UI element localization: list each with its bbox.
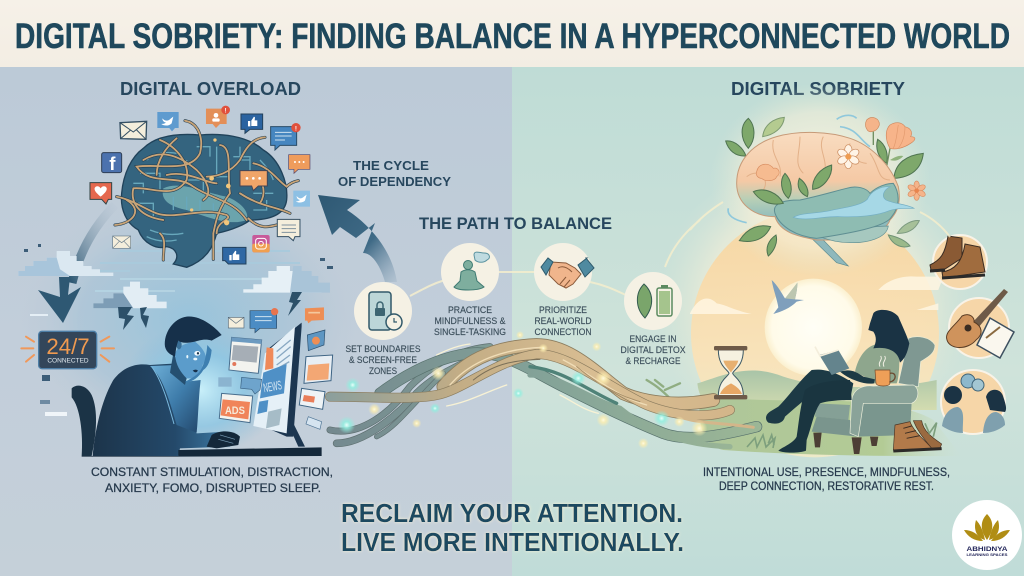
icon: 24/7 connected display: 24/7 bbox=[46, 334, 90, 359]
caption: sobriety benefits: INTENTIONAL USE, PRESENCE, MINDFULNESS, bbox=[703, 465, 950, 479]
icon: chat alert bbox=[271, 123, 301, 150]
monitor with news bbox=[253, 323, 305, 447]
label: step 3: REAL-WORLD bbox=[534, 315, 592, 326]
panel: right background, digital sobriety bbox=[512, 66, 1024, 576]
caption: overload symptoms bbox=[91, 465, 333, 495]
armchair bbox=[812, 337, 935, 454]
icon: guitar bbox=[946, 289, 1008, 348]
arrow: cycle of dependency, down arrow bbox=[38, 205, 115, 323]
twisted rope path bbox=[330, 331, 757, 449]
icon: chat alert: ! bbox=[295, 125, 297, 132]
label: the cycle of dependency bbox=[338, 158, 451, 189]
caption: sobriety benefits bbox=[703, 465, 950, 493]
clouds, left bbox=[18, 251, 330, 308]
icon: lightning bolts bbox=[118, 292, 302, 330]
icon: twitter square bbox=[293, 191, 310, 207]
icon: envelope bbox=[120, 121, 147, 139]
water wave bbox=[793, 187, 914, 219]
icon: phone with lock and clock bbox=[369, 292, 402, 330]
title band bbox=[0, 0, 1024, 67]
leaves and flowers behind brain bbox=[726, 117, 923, 256]
man torso bbox=[93, 363, 230, 456]
glow behind sun bbox=[657, 153, 970, 460]
icon: tangled circuit brain bbox=[115, 121, 298, 267]
logo: abhidnya learning spaces bbox=[952, 500, 1022, 570]
sleeve highlight bbox=[152, 367, 174, 424]
icon: thumbs up bbox=[241, 114, 263, 133]
popup: orange tag bbox=[305, 307, 324, 323]
icon: facebook: f bbox=[109, 153, 116, 174]
label: step 2: MINDFULNESS & bbox=[434, 315, 506, 326]
rope: front tan strands bbox=[330, 345, 753, 427]
man hand on head bbox=[185, 345, 212, 382]
icon: thumbs up lower bbox=[223, 247, 246, 264]
popup: small chats bbox=[218, 377, 262, 394]
caption: overload symptoms: CONSTANT STIMULATION, DISTRACTION, bbox=[91, 465, 333, 479]
label: step 1: ZONES bbox=[369, 365, 397, 376]
label: step 3: CONNECTION bbox=[534, 326, 592, 337]
heading: the path to balance: THE PATH TO BALANCE bbox=[419, 215, 612, 233]
icon: twitter bubble bbox=[157, 112, 179, 131]
icon: envelope lower bbox=[113, 236, 131, 248]
icon: handshake bbox=[541, 258, 594, 288]
brain glow bbox=[710, 83, 930, 277]
panel: left background, digital overload bbox=[0, 66, 512, 576]
man arm bbox=[150, 365, 201, 433]
sobriety sun scene bbox=[657, 153, 970, 460]
icon: large orange chat bbox=[240, 171, 267, 191]
label: step 3: PRIORITIZE bbox=[539, 304, 587, 315]
icon: facebook bbox=[102, 153, 122, 174]
glow behind man bbox=[120, 323, 280, 457]
icon: instagram bbox=[252, 235, 270, 252]
chair bbox=[72, 386, 96, 456]
label: step 2: PRACTICE bbox=[448, 304, 492, 315]
man at computer scene bbox=[21, 307, 333, 457]
icon: lotus bbox=[964, 514, 1010, 541]
circle: hiking boots bbox=[930, 235, 987, 289]
sun disc bbox=[691, 209, 939, 457]
cerebellum bbox=[820, 226, 888, 243]
label: step 1: & SCREEN-FREE bbox=[349, 354, 417, 365]
ground bbox=[699, 399, 962, 456]
icon: profile notification: ! bbox=[225, 108, 227, 114]
icon: hourglass bbox=[714, 346, 747, 399]
heading: digital overload: DIGITAL OVERLOAD bbox=[120, 79, 301, 99]
rope: twig leaves bbox=[647, 380, 680, 398]
icon: battery bbox=[657, 285, 672, 316]
hills bbox=[697, 371, 937, 410]
icon: meditating figure bbox=[454, 252, 489, 290]
label: the cycle of dependency: OF DEPENDENCY bbox=[338, 174, 451, 189]
label: step 4: ENGAGE IN bbox=[630, 333, 676, 344]
popup: chart window bbox=[304, 355, 333, 383]
label: step 4 bbox=[620, 333, 686, 366]
circle: two people talking bbox=[941, 370, 1006, 434]
rope: wisps bbox=[437, 344, 598, 413]
clouds in sun bbox=[690, 276, 943, 314]
man neck bbox=[170, 353, 187, 385]
heading: digital sobriety: DIGITAL SOBRIETY bbox=[731, 79, 905, 99]
call to action: LIVE MORE INTENTIONALLY. bbox=[341, 529, 684, 557]
label: step 1: SET BOUNDARIES bbox=[346, 343, 420, 354]
arrow: cycle of dependency, up arrow bbox=[318, 195, 397, 282]
icon: two people bbox=[942, 374, 1006, 433]
logo text: ABHIDNYA bbox=[966, 546, 1008, 553]
logo text: LEARNING SPACES bbox=[966, 553, 1008, 557]
icon: blooming brain bbox=[710, 83, 930, 277]
step 3: real-world connection bbox=[534, 243, 594, 337]
sun centre bbox=[765, 279, 862, 376]
icon: 24/7 connected display: CONNECTED bbox=[47, 358, 89, 365]
lower lobe bbox=[774, 183, 898, 238]
grass tufts bbox=[768, 423, 937, 445]
circle: guitar and notebook bbox=[946, 289, 1014, 358]
logo text bbox=[966, 546, 1008, 557]
desk bbox=[82, 447, 322, 457]
man face bbox=[175, 342, 206, 379]
caption: sobriety benefits: DEEP CONNECTION, RESTORATIVE REST. bbox=[719, 479, 934, 493]
popup: envelope small bbox=[306, 417, 322, 429]
brain body bbox=[737, 132, 899, 240]
woman silhouette bbox=[766, 310, 909, 453]
rope sparkles bbox=[338, 331, 707, 449]
label: the cycle of dependency: THE CYCLE bbox=[353, 158, 429, 173]
icon: bird bbox=[772, 280, 804, 314]
flowers on brain bbox=[756, 145, 926, 200]
icon: notebook bbox=[977, 318, 1014, 358]
icon: boots bbox=[930, 236, 985, 278]
label: step 2 bbox=[434, 304, 506, 337]
left pixel haze backdrop bbox=[20, 195, 360, 445]
icon: hiking boots on ground bbox=[893, 421, 942, 451]
popups: browser windows and alerts bbox=[218, 307, 333, 429]
man hair bbox=[165, 317, 222, 357]
icon: book bbox=[815, 347, 849, 375]
woman in armchair scene bbox=[766, 310, 942, 454]
popup: ads window: ADS bbox=[225, 405, 245, 417]
label: step 3 bbox=[534, 304, 592, 337]
step 4: digital detox bbox=[620, 272, 686, 366]
popup: shield badge bbox=[307, 330, 325, 351]
icon: message card bbox=[277, 219, 300, 241]
popup: chat alert bbox=[250, 308, 278, 333]
call to action: RECLAIM YOUR ATTENTION. bbox=[341, 500, 683, 528]
man hand on keyboard bbox=[207, 431, 240, 448]
popup: small window bbox=[299, 388, 325, 409]
icon: leaf bbox=[637, 284, 652, 318]
label: step 4: & RECHARGE bbox=[626, 355, 680, 366]
rope: back strands bbox=[330, 347, 757, 447]
label: step 2: SINGLE-TASKING bbox=[434, 326, 506, 337]
label: step 1 bbox=[346, 343, 420, 376]
icon: 24/7 connected display bbox=[21, 331, 114, 369]
icon: heart bbox=[90, 183, 112, 204]
icon: mug bbox=[875, 356, 895, 386]
call to action bbox=[341, 500, 684, 557]
wisps bbox=[728, 115, 870, 223]
popup: envelope bbox=[228, 317, 244, 328]
chair and man silhouette bbox=[72, 317, 240, 456]
man ear bbox=[176, 341, 182, 349]
popup: article window bbox=[229, 337, 262, 373]
social media icons around brain bbox=[90, 106, 310, 264]
grass tufts left bbox=[747, 435, 775, 448]
step 1: set boundaries bbox=[346, 282, 420, 376]
brain stem bbox=[812, 237, 848, 266]
leaves on brain bbox=[753, 165, 832, 204]
label: step 4: DIGITAL DETOX bbox=[620, 344, 686, 355]
monitor with news: NEWS bbox=[262, 378, 283, 395]
brain folds bbox=[747, 137, 890, 190]
step 2: practice mindfulness bbox=[434, 243, 506, 337]
icon: profile notification bbox=[206, 106, 230, 128]
icon: small orange chat bbox=[289, 155, 310, 173]
path connector lines bbox=[410, 202, 950, 296]
caption: overload symptoms: ANXIETY, FOMO, DISRUPTED SLEEP. bbox=[105, 481, 321, 495]
